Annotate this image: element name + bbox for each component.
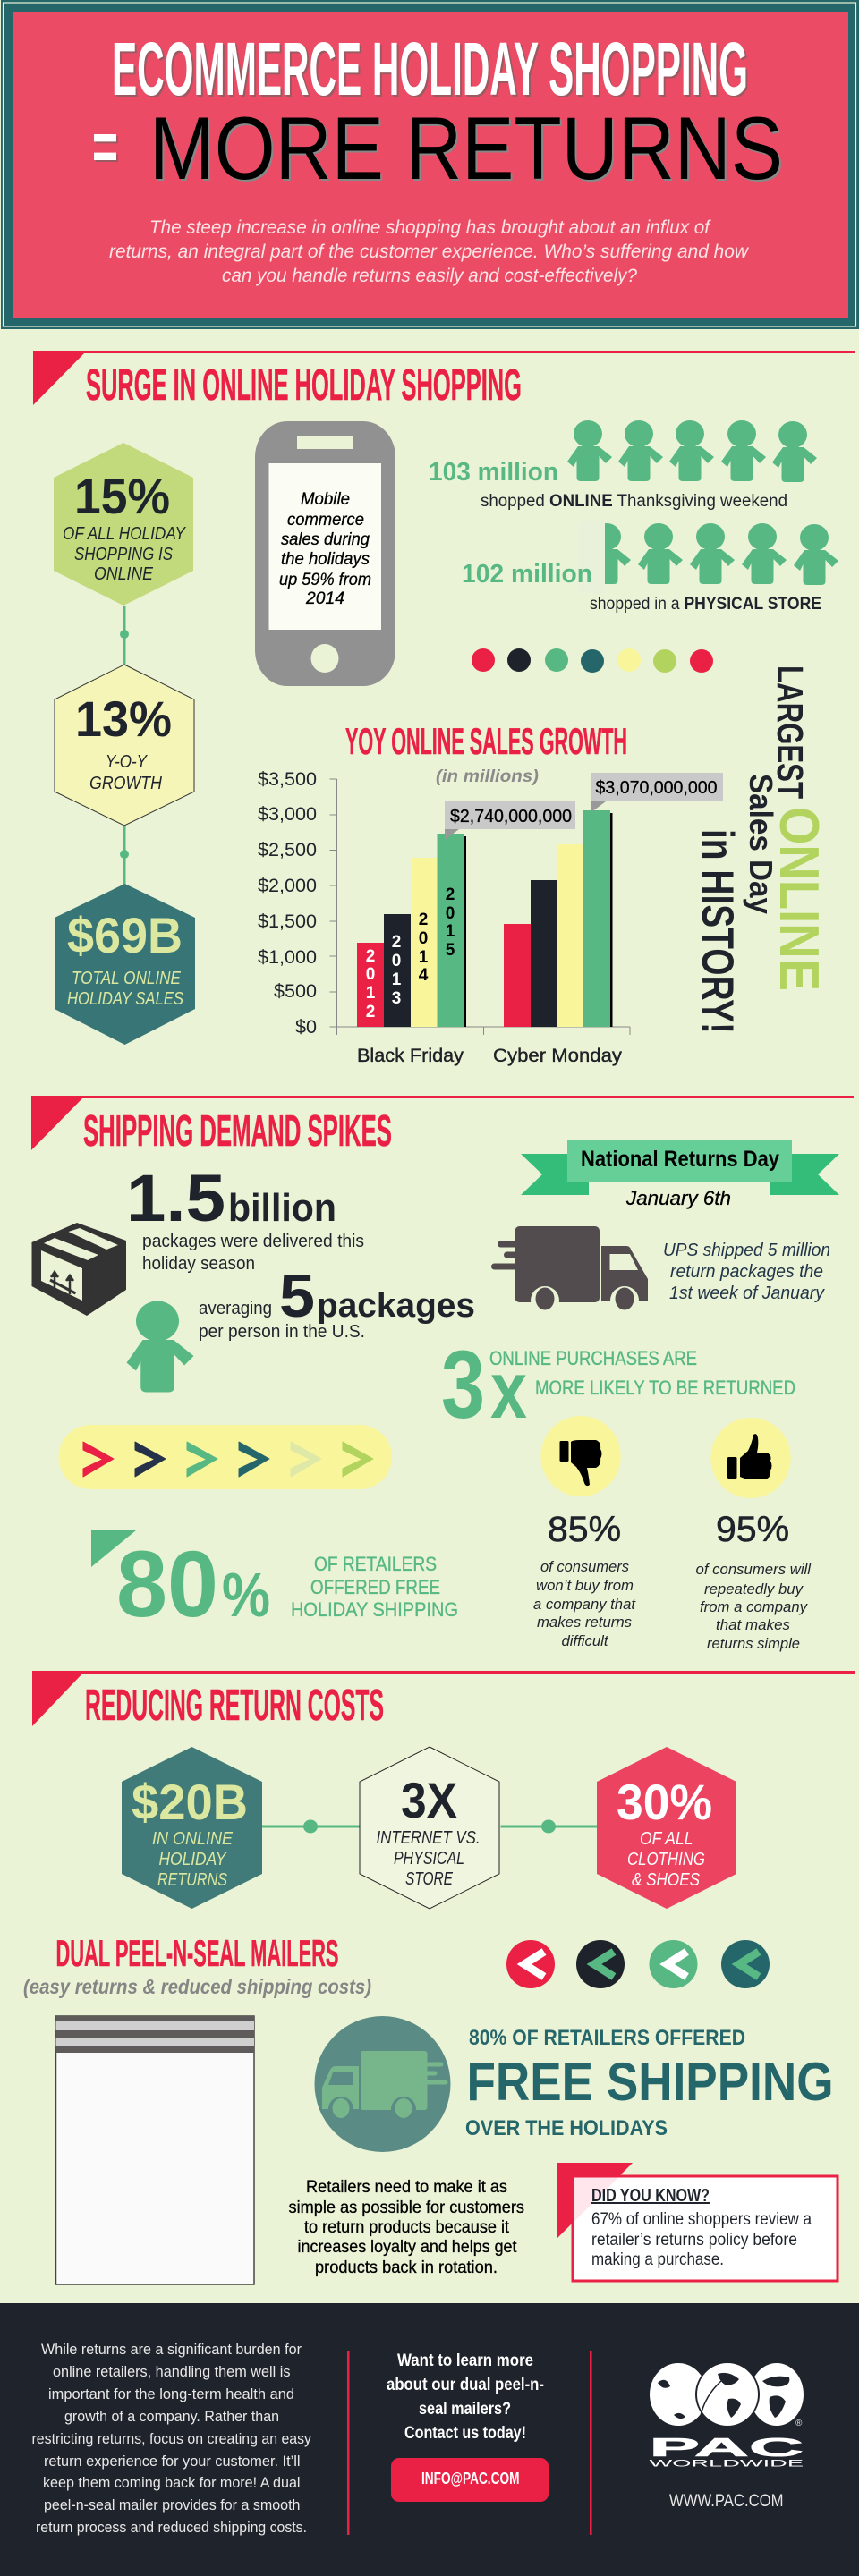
y axis labels: $0: [295, 1017, 317, 1038]
y axis labels: $3,500: [258, 769, 317, 790]
hexagon: 3X: 3X: [401, 1772, 457, 1828]
chevron strip: [59, 1425, 392, 1489]
y axis labels: $1,000: [258, 947, 317, 968]
people row: store shoppers: [578, 521, 838, 593]
bars: Black Friday: 2014: [419, 911, 429, 985]
hexagon: 15 percent: [54, 443, 193, 606]
stat: 5 packages per person: [199, 1262, 475, 1342]
stat: 3x more likely to be returned: 3: [441, 1330, 485, 1438]
mobile commerce text: Mobile: [301, 490, 350, 509]
connector: [120, 826, 129, 885]
stat: 95 percent: returns simple: [707, 1635, 800, 1652]
callout: Black Friday 2015: $2,740,000,000: [450, 807, 572, 826]
stat: 103 million online: [429, 458, 787, 511]
intro paragraph: can you handle returns easily and cost-effectively?: [222, 266, 637, 286]
hexagon: 20 billion: $20B: [132, 1774, 248, 1830]
stat: 1.5 billion packages: packages were delivered this: [142, 1232, 364, 1251]
ribbon: national returns day: National Returns Day: [581, 1147, 779, 1172]
mailer illustration: [55, 2016, 254, 2284]
hexagon: 15 percent: 15%: [74, 468, 170, 524]
mobile commerce text: commerce: [287, 511, 364, 530]
stat: 3x more likely to be returned: x: [490, 1346, 527, 1436]
bars: Black Friday: 2013: [392, 933, 402, 1008]
section two heading: SHIPPING DEMAND SPIKES: [83, 1107, 392, 1156]
stat: 95 percent: [696, 1510, 812, 1652]
stat: 3x more likely to be returned: MORE LIKELY TO BE RETURNED: [535, 1377, 795, 1399]
bars: Black Friday: [357, 834, 466, 1027]
logo: PAC Worldwide: PAC: [650, 2434, 804, 2462]
email button: INFO@PAC.COM: [421, 2470, 519, 2487]
stat: 85 percent: [533, 1510, 636, 1649]
footer: [0, 2303, 859, 2576]
x axis labels: Black Friday: [357, 1046, 464, 1066]
hexagon: 20 billion: HOLIDAY: [159, 1850, 227, 1869]
stat: 85 percent: difficult: [562, 1632, 609, 1649]
hexagon: 3X: STORE: [405, 1869, 454, 1889]
hexagon: 30 percent: [597, 1747, 736, 1909]
hexagon: 69 billion: [55, 884, 195, 1045]
footer paragraph: online retailers, handling them well is: [53, 2363, 290, 2380]
bars: Black Friday: 2012: [366, 947, 376, 1021]
hexagon: 30 percent: 30%: [617, 1774, 712, 1830]
callout: did you know: retailer’s returns policy before: [591, 2231, 797, 2250]
email button: [391, 2458, 549, 2502]
connector: [262, 1819, 360, 1834]
hexagon: 20 billion: [122, 1747, 262, 1909]
bars: Cyber Monday: [504, 810, 612, 1027]
stat: 95 percent: from a company: [700, 1598, 808, 1615]
footer paragraph: restricting returns, focus on creating an easy: [32, 2430, 311, 2447]
mobile commerce text: 2014: [305, 589, 344, 608]
retailers paragraph: products back in rotation.: [315, 2258, 498, 2277]
stat: 80 percent free shipping: OFFERED FREE: [310, 1576, 440, 1598]
y axis labels: $2,000: [258, 876, 317, 896]
logo: PAC Worldwide: ®: [795, 2419, 803, 2428]
icon: thumbs up: [710, 1418, 791, 1498]
stat: 5 packages per person: averaging: [199, 1299, 272, 1318]
callout: did you know: DID YOU KNOW?: [591, 2186, 710, 2206]
stat: 1.5 billion packages: billion: [228, 1186, 336, 1230]
header banner: [1, 0, 859, 329]
stat: 80 percent free shipping: [91, 1530, 458, 1637]
stat: 85 percent: makes returns: [537, 1614, 632, 1631]
section three heading: REDUCING RETURN COSTS: [85, 1682, 384, 1730]
free shipping text: [465, 2026, 834, 2140]
hexagon: 3X: PHYSICAL: [394, 1849, 464, 1868]
hexagon: 15 percent: SHOPPING IS: [74, 545, 174, 564]
mailers heading: (easy returns & reduced shipping costs): [23, 1975, 371, 1998]
free shipping text: 80% OF RETAILERS OFFERED: [469, 2026, 745, 2050]
stat: 102 million store: [462, 560, 821, 614]
rotated callout: largest online sales day: ONLINE: [768, 807, 829, 991]
stat: 85 percent: won’t buy from: [536, 1577, 634, 1594]
hexagon: 13 percent: GROWTH: [89, 774, 162, 793]
UPS returns text: 1st week of January: [669, 1284, 825, 1303]
UPS returns text: return packages the: [670, 1262, 823, 1282]
contact prompt: [387, 2351, 544, 2443]
mailers heading: [23, 1932, 371, 1998]
stat: 102 million store: 102 million: [462, 560, 592, 589]
stat: 1.5 billion packages: 1.5: [126, 1161, 225, 1235]
y axis labels: $1,500: [258, 911, 317, 932]
hexagon: 13 percent: [55, 665, 194, 826]
logo: PAC Worldwide: [650, 2362, 804, 2469]
stat: 80 percent free shipping: 80: [116, 1532, 218, 1637]
mailers heading: DUAL PEEL-N-SEAL MAILERS: [55, 1932, 338, 1974]
icon: smartphone: [255, 421, 395, 686]
footer paragraph: keep them coming back for more! A dual: [43, 2474, 301, 2491]
icon: delivery truck: [491, 1226, 648, 1315]
rotated callout: largest online sales day: Sales Day: [743, 774, 779, 914]
hexagon: 30 percent: CLOTHING: [627, 1850, 705, 1869]
UPS returns text: UPS shipped 5 million: [663, 1241, 830, 1260]
callout: Cyber Monday 2015: $3,070,000,000: [596, 778, 718, 798]
footer paragraph: While returns are a significant burden for: [41, 2341, 302, 2358]
equals sign: =: [92, 108, 118, 185]
stat: 102 million store: shopped in a PHYSICAL STORE: [590, 595, 821, 614]
stat: 85 percent: a company that: [533, 1596, 636, 1613]
footer paragraph: return process and reduced shipping costs.: [36, 2519, 307, 2536]
hexagon: 3X: INTERNET VS.: [376, 1828, 480, 1848]
mobile commerce text: [279, 490, 371, 608]
retailers paragraph: increases loyalty and helps get: [297, 2238, 517, 2257]
callout: did you know: 67% of online shoppers review a: [591, 2210, 812, 2229]
people row: online shoppers: [567, 420, 817, 482]
connector: [501, 1819, 598, 1834]
bar chart: YOY online sales growth: [258, 720, 723, 1066]
intro paragraph: returns, an integral part of the customer experience. Who’s suffering and how: [109, 242, 750, 262]
stat: 103 million online: 103 million: [429, 458, 558, 487]
stat: 5 packages per person: per person in the U.S.: [199, 1322, 365, 1342]
icon: free shipping truck: [315, 2016, 451, 2152]
footer paragraph: important for the long-term health and: [48, 2385, 294, 2402]
mobile commerce text: the holidays: [281, 550, 370, 569]
contact prompt: Contact us today!: [404, 2424, 526, 2443]
retailers paragraph: to return products because it: [304, 2218, 510, 2237]
chart subtitle: (in millions): [436, 767, 539, 786]
callout: Cyber Monday 2015: [591, 773, 723, 812]
stat: 95 percent: repeatedly buy: [704, 1580, 804, 1597]
stat: 80 percent free shipping: OF RETAILERS: [314, 1553, 437, 1575]
x axis labels: Cyber Monday: [493, 1046, 623, 1066]
stat: 95 percent: that makes: [716, 1616, 790, 1633]
hexagon: 30 percent: & SHOES: [632, 1870, 701, 1890]
hexagon: 20 billion: RETURNS: [157, 1870, 228, 1890]
icon: thumbs down: [540, 1416, 621, 1496]
y axis labels: $3,000: [258, 804, 317, 825]
rotated callout: largest online sales day: LARGEST: [770, 665, 811, 799]
stat: 103 million online: shopped ONLINE Thanksgiving weekend: [481, 492, 787, 511]
hexagon: 20 billion: IN ONLINE: [152, 1829, 234, 1849]
section two heading: [31, 1096, 854, 1156]
stat: 95 percent: of consumers will: [696, 1561, 812, 1578]
hexagon: 69 billion: $69B: [67, 907, 183, 963]
stat: 85 percent: 85%: [548, 1510, 621, 1549]
UPS returns text: [663, 1241, 830, 1303]
footer paragraph: growth of a company. Rather than: [64, 2408, 279, 2425]
date: January 6th: January 6th: [625, 1187, 731, 1209]
footer paragraph: peel-n-seal mailer provides for a smooth: [44, 2496, 301, 2513]
retailers paragraph: Retailers need to make it as: [306, 2178, 507, 2197]
coloured dots: [472, 648, 713, 673]
ribbon: national returns day: [521, 1140, 839, 1195]
stat: 3x more likely to be returned: ONLINE PURCHASES ARE: [489, 1347, 697, 1369]
contact prompt: about our dual peel-n-: [387, 2376, 544, 2394]
hexagon: 69 billion: HOLIDAY SALES: [67, 989, 184, 1009]
stat: 5 packages per person: 5: [279, 1262, 315, 1330]
logo: PAC Worldwide: WORLDWIDE: [650, 2458, 804, 2469]
stat: 80 percent free shipping: %: [222, 1560, 270, 1630]
contact prompt: Want to learn more: [397, 2351, 533, 2370]
mobile commerce text: up 59% from: [279, 571, 371, 589]
stat: 1.5 billion packages: holiday season: [142, 1254, 255, 1274]
hexagon: 13 percent: 13%: [75, 691, 172, 747]
y axis labels: [258, 769, 317, 1038]
stat: 95 percent: 95%: [716, 1510, 789, 1549]
hexagon: 30 percent: OF ALL: [640, 1829, 693, 1849]
callout: did you know: [557, 2163, 838, 2281]
y axis labels: $500: [274, 981, 317, 1002]
intro paragraph: The steep increase in online shopping has brought about an influx of: [149, 217, 711, 238]
footer paragraph: return experience for your customer. It’ll: [44, 2453, 301, 2470]
footer paragraph: [32, 2341, 311, 2536]
hexagon: 15 percent: OF ALL HOLIDAY: [63, 524, 186, 544]
title line two: MORE RETURNS: [149, 98, 783, 198]
rotated callout: largest online sales day: [693, 665, 829, 1034]
hexagon: 13 percent: Y-O-Y: [106, 752, 148, 772]
callout: did you know: making a purchase.: [591, 2250, 724, 2269]
x axis labels: [357, 1046, 623, 1066]
callout: Black Friday 2015: [445, 801, 575, 840]
website: WWW.PAC.COM: [669, 2492, 784, 2511]
y axis labels: $2,500: [258, 840, 317, 860]
retailers paragraph: simple as possible for customers: [288, 2199, 524, 2217]
connector: [120, 606, 129, 665]
section three heading: [32, 1671, 855, 1730]
icon: person: [127, 1301, 193, 1392]
stat: 3x more likely to be returned: [441, 1330, 795, 1438]
retailers paragraph: [288, 2178, 524, 2277]
stat: 1.5 billion packages: [126, 1161, 364, 1274]
rotated callout: largest online sales day: in HISTORY!: [693, 829, 743, 1034]
hexagon: 15 percent: ONLINE: [94, 564, 154, 584]
free shipping text: OVER THE HOLIDAYS: [465, 2116, 668, 2140]
mobile commerce text: sales during: [281, 530, 370, 549]
icon: package box: [32, 1223, 126, 1316]
hexagon: 3X: [360, 1747, 499, 1909]
stat: 85 percent: of consumers: [540, 1558, 629, 1575]
hexagon: 69 billion: TOTAL ONLINE: [72, 969, 182, 988]
intro paragraph: [109, 217, 750, 286]
contact prompt: seal mailers?: [419, 2400, 511, 2419]
stat: 5 packages per person: packages: [317, 1287, 475, 1325]
bars: Black Friday: 2015: [446, 886, 455, 960]
icons: chevron circles: [506, 1940, 770, 1988]
stat: 80 percent free shipping: HOLIDAY SHIPPING: [291, 1598, 458, 1621]
